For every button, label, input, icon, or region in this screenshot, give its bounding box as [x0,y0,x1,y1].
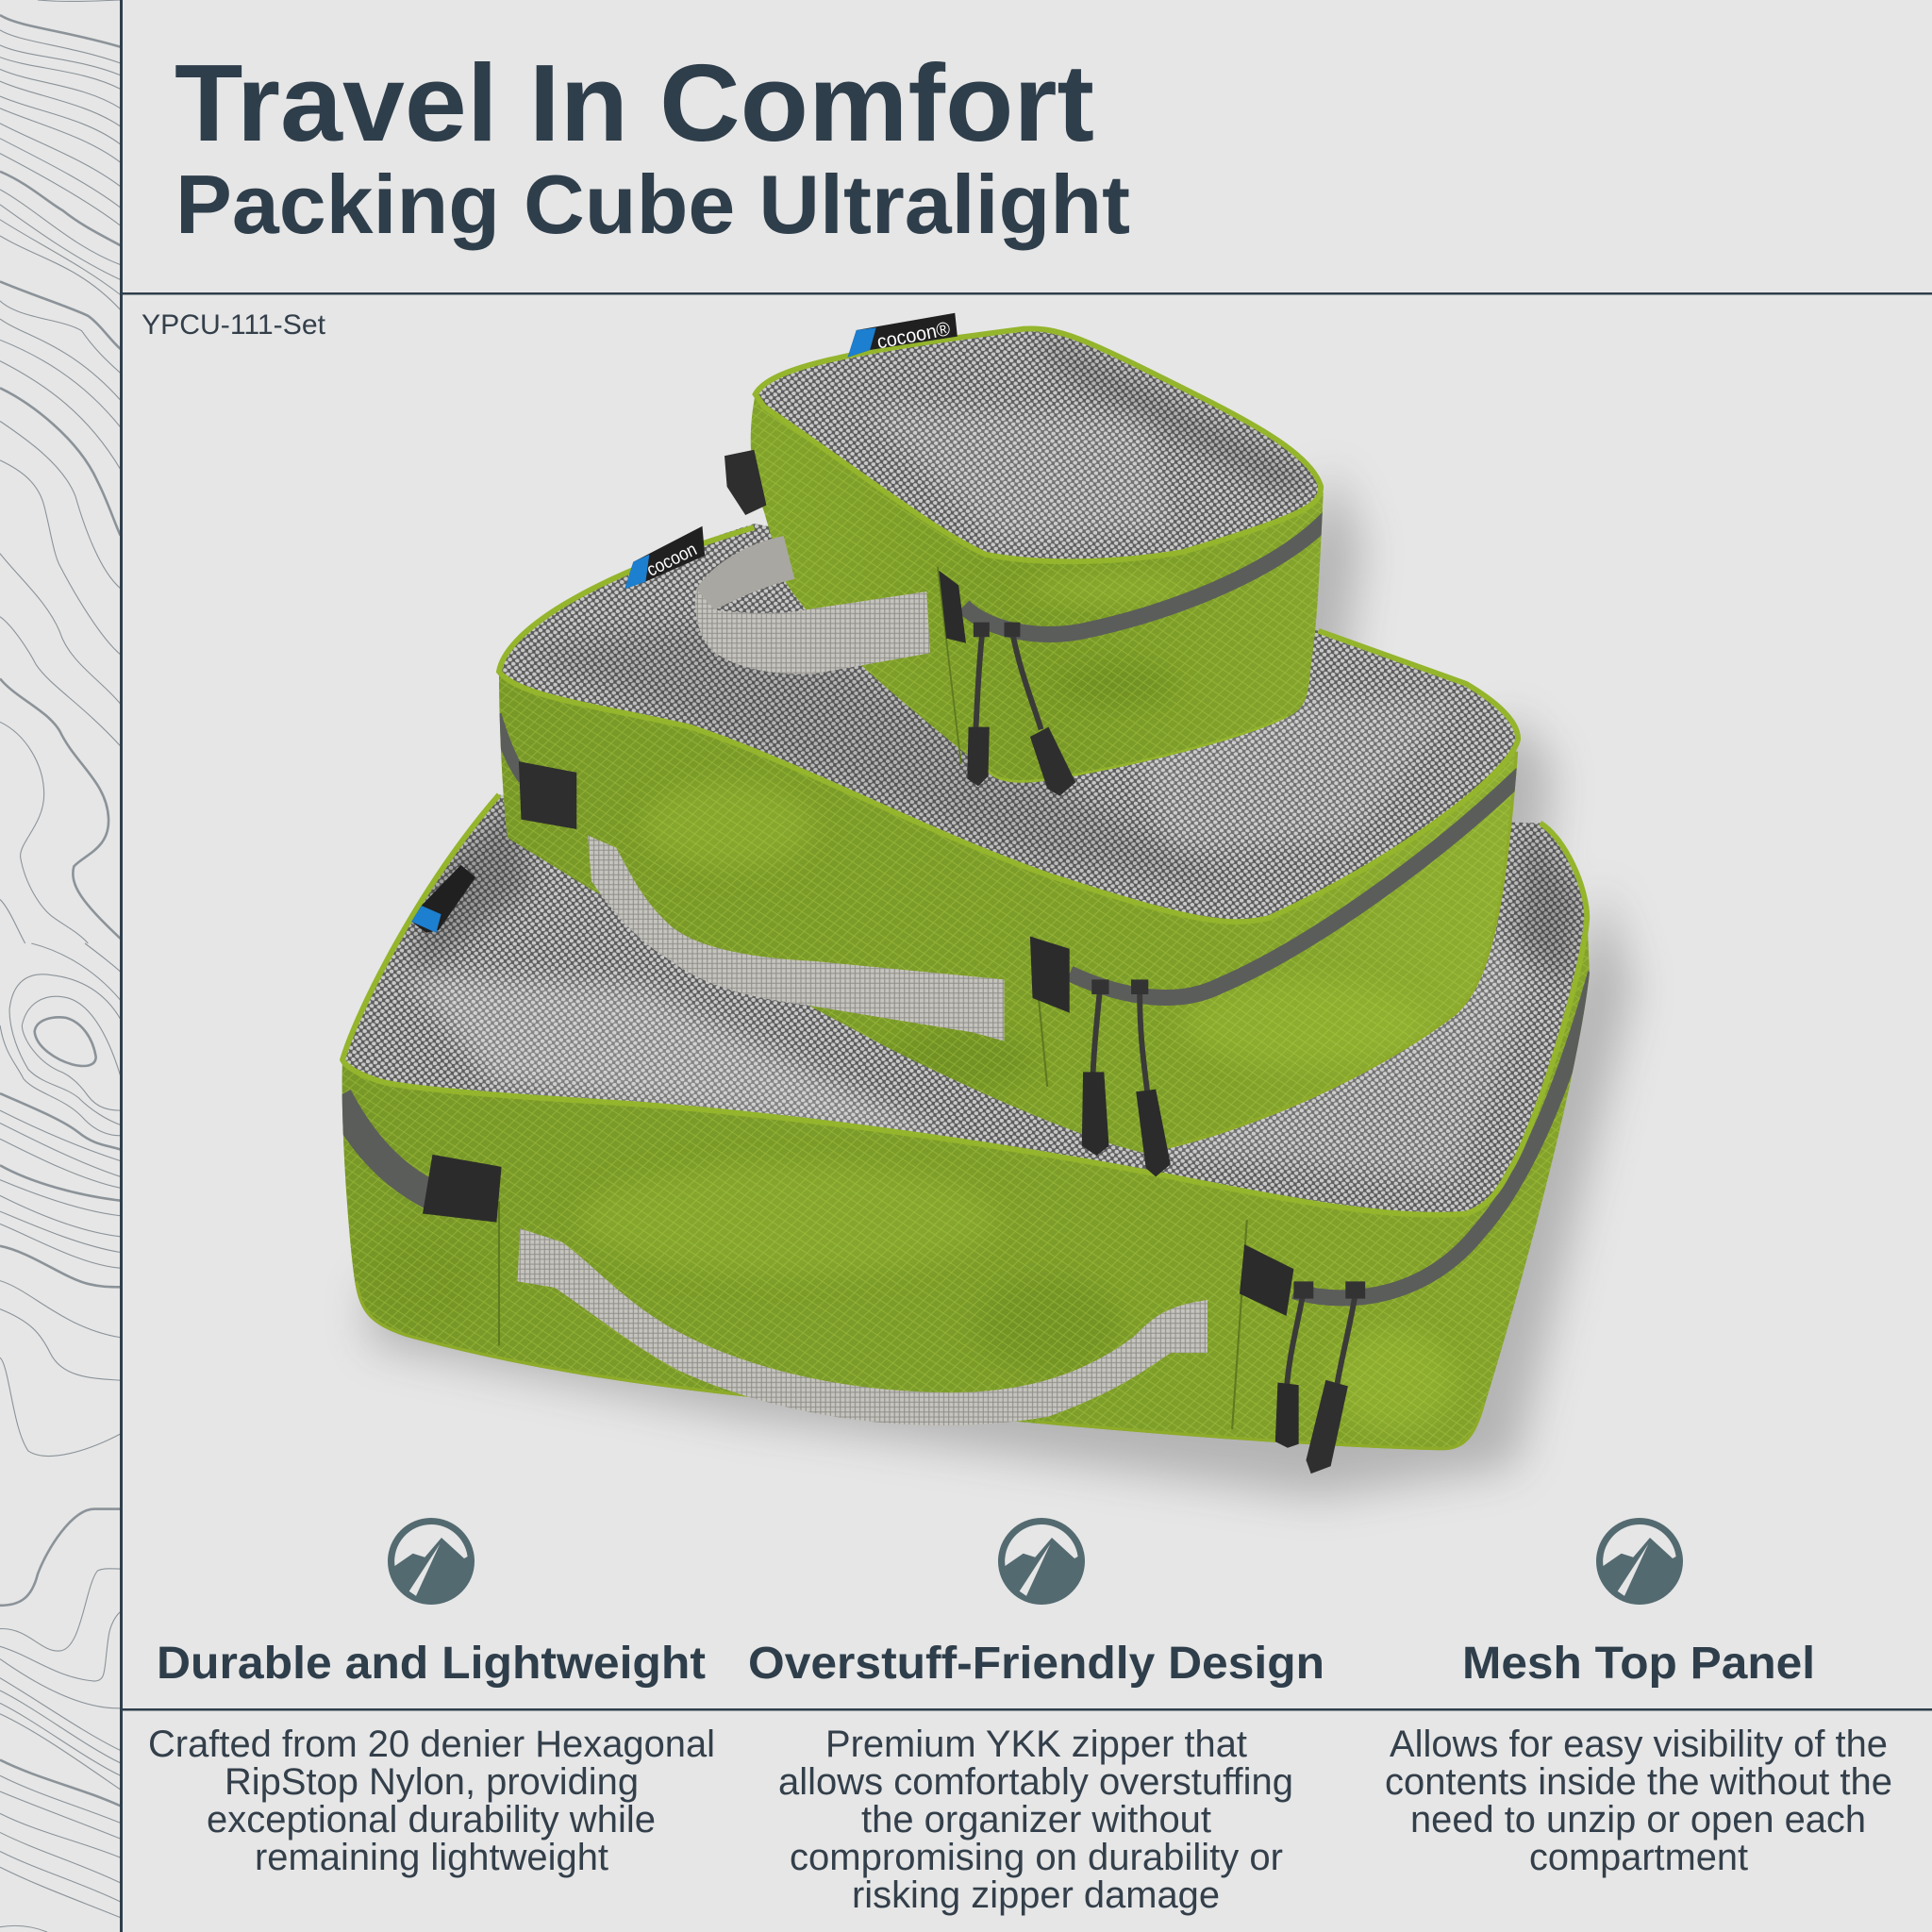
frame line: text rule [122,1708,1932,1711]
medium cube zipper pulls [1082,979,1171,1176]
large cube piping [342,794,1587,1215]
body text: exceptional durability while [207,1799,656,1840]
frame line: header rule [122,292,1932,294]
body text [148,1724,715,1878]
large cube mesh shading [407,801,1583,1183]
product photo: three stacked packing cubes [333,313,1633,1497]
body text: Allows for easy visibility of the [1390,1724,1888,1765]
body text: remaining lightweight [255,1837,608,1878]
body text: Premium YKK zipper that [825,1724,1247,1765]
body text: Crafted from 20 denier Hexagonal [148,1724,715,1765]
body text: contents inside the without the [1385,1761,1892,1803]
medium cube zipper right [1070,774,1522,997]
medium cube fabric highlights [492,665,1528,1158]
column: mesh top panel [1385,1518,1892,1878]
body text: risking zipper damage [852,1874,1220,1916]
brand tag: small cube [848,313,958,358]
small cube body [751,394,1324,783]
medium cube tab left [519,761,576,829]
body text: the organizer without [861,1799,1211,1840]
panel: topographic contour strip [0,0,121,1932]
medium cube zipper left [500,713,521,783]
body text [1385,1724,1892,1878]
body text: allows comfortably overstuffing [778,1761,1293,1803]
small cube tab [939,571,966,643]
small cube mesh shading [862,330,1319,542]
large cube zipper right [1293,974,1595,1298]
frame line: vertical [120,0,123,1932]
title: Travel In Comfort [175,42,1094,164]
brand tag: large cube [411,865,475,933]
column: durable and lightweight [148,1518,715,1878]
large cube fabric highlights [333,899,1602,1466]
small cube [695,328,1331,796]
small cube fabric and zipper [751,403,1323,783]
icon: mountain badge [1596,1518,1683,1605]
heading: Durable and Lightweight [157,1639,706,1689]
medium cube mesh shading [518,616,1454,887]
large cube [333,794,1602,1474]
small cube mesh top [756,328,1321,561]
medium cube piping [499,527,1518,922]
icon: mountain badge [388,1518,475,1605]
medium cube body [499,641,1518,1154]
large cube zipper left [338,1096,431,1195]
large cube tab left [423,1155,502,1223]
medium cube mesh top [499,524,1518,922]
small cube handle inner [696,536,794,610]
small cube zipper pulls [967,623,1075,796]
large cube seams [499,1201,1247,1429]
heading: Overstuff-Friendly Design [748,1639,1324,1689]
medium cube seam [1033,937,1047,1087]
small cube seam [938,567,961,764]
icon: mountain badge [998,1518,1085,1605]
column: overstuff-friendly design [748,1518,1324,1916]
large cube handle [518,1228,1208,1425]
large cube mesh top [342,794,1587,1215]
brand tag: medium cube: cocoon [643,539,700,581]
small cube handle [695,589,930,675]
subtitle: Packing Cube Ultralight [175,158,1130,251]
body text [778,1724,1293,1916]
large cube zipper pulls [1275,1281,1365,1474]
medium cube handle [588,836,1004,1041]
body text: need to unzip or open each [1410,1799,1866,1840]
large cube tab right [1240,1244,1293,1316]
brand tag: small cube: cocoon® [875,318,953,354]
medium cube tab right [1030,937,1070,1013]
small cube back loop [724,450,766,515]
medium cube [492,524,1528,1176]
product code: YPCU-111-Set [142,309,325,341]
body text: RipStop Nylon, providing [225,1761,639,1803]
body text: compromising on durability or [790,1837,1283,1878]
heading: Mesh Top Panel [1462,1639,1815,1689]
large cube body [342,912,1590,1450]
small cube piping [756,328,1321,561]
brand tag: medium cube [625,526,705,589]
cast shadows [370,468,1633,1497]
body text: compartment [1529,1837,1748,1878]
